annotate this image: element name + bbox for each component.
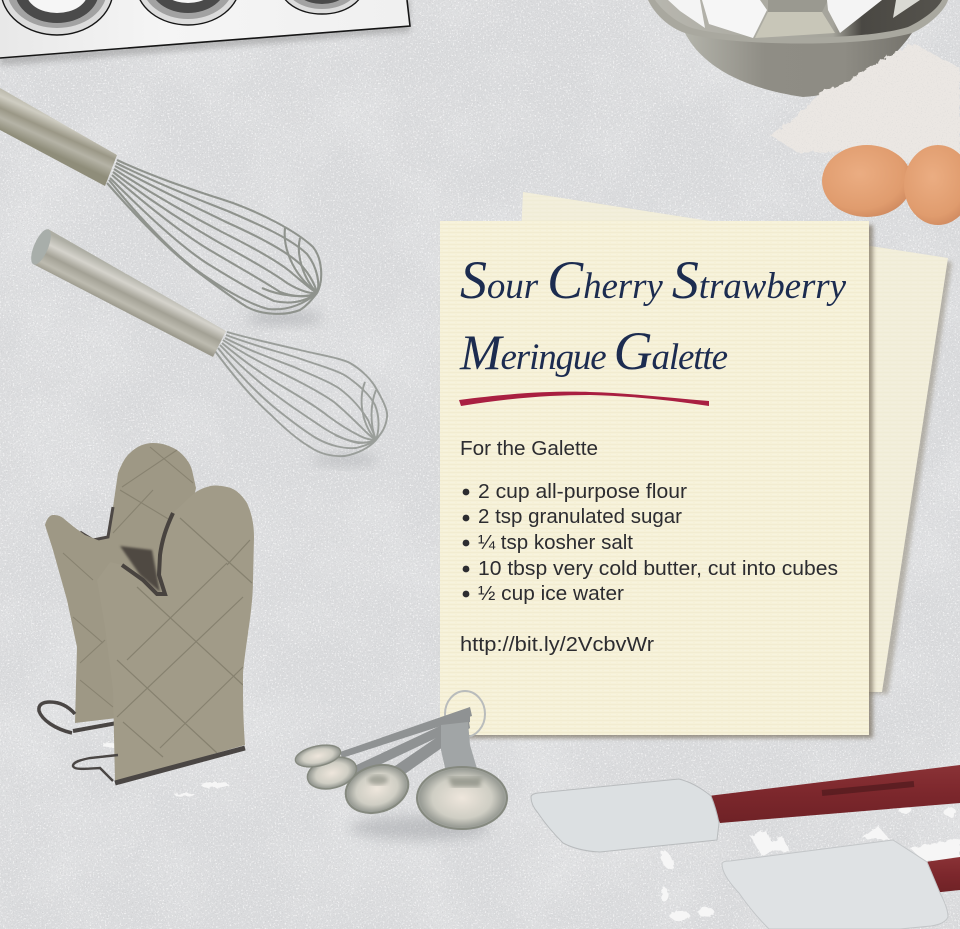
recipe title: Sour Cherry Strawberry bbox=[460, 250, 847, 310]
mixing bowl bbox=[648, 0, 948, 97]
tablespoon bowl bbox=[417, 767, 507, 829]
teaspoon bowl bbox=[339, 757, 415, 821]
back mitt crotch trim bbox=[80, 507, 113, 540]
muffin tin bbox=[0, 0, 410, 66]
ingredient list: 2 tsp granulated sugar bbox=[478, 506, 682, 528]
ingredient list: 2 cup all-purpose flour bbox=[478, 481, 687, 503]
spatula blade bbox=[531, 779, 719, 852]
ingredient list: ¼ tsp kosher salt bbox=[478, 532, 633, 554]
muffin cup 3 bbox=[280, 0, 364, 14]
whisk handle bbox=[33, 229, 226, 357]
mitt: front bbox=[62, 486, 254, 783]
ingredient list bbox=[463, 481, 838, 605]
whisk: lower bbox=[27, 227, 387, 465]
spoon handles bbox=[340, 707, 478, 776]
whisk handle bbox=[0, 88, 117, 186]
back mitt cuff and loop bbox=[73, 723, 117, 731]
recipe title: Meringue Galette bbox=[459, 321, 728, 381]
flour pile bbox=[760, 40, 960, 165]
title underline bbox=[459, 392, 709, 406]
front mitt cuff and loop bbox=[115, 748, 245, 783]
muffin cup 1 bbox=[1, 0, 113, 35]
muffin cup 2 bbox=[136, 0, 240, 25]
recipe paper: back sheet bbox=[500, 192, 952, 694]
flour splats bbox=[102, 743, 960, 921]
spatula blade bbox=[722, 840, 948, 929]
measuring spoons bbox=[293, 691, 507, 840]
recipe title bbox=[459, 250, 847, 381]
spatula handle bbox=[925, 857, 960, 893]
half teaspoon bowl bbox=[304, 752, 360, 794]
eggs bbox=[822, 145, 960, 225]
ingredient list: 10 tbsp very cold butter, cut into cubes bbox=[478, 558, 838, 580]
spatula: upper bbox=[531, 765, 960, 852]
handle end cap bbox=[27, 227, 55, 267]
spatula handle bbox=[708, 765, 960, 823]
whisk: upper bbox=[0, 88, 323, 324]
mitt: back bbox=[39, 443, 196, 733]
source link: http://bit.ly/2VcbvWr bbox=[460, 634, 654, 656]
spoon ring bbox=[445, 691, 485, 737]
recipe paper: front sheet bbox=[440, 221, 873, 738]
oven mitts bbox=[39, 443, 254, 783]
ingredient list: ½ cup ice water bbox=[478, 583, 624, 605]
recipe section heading: For the Galette bbox=[460, 438, 598, 460]
front mitt crotch trim bbox=[122, 513, 173, 594]
spatula: lower bbox=[722, 840, 960, 929]
quarter teaspoon bowl bbox=[293, 741, 343, 771]
